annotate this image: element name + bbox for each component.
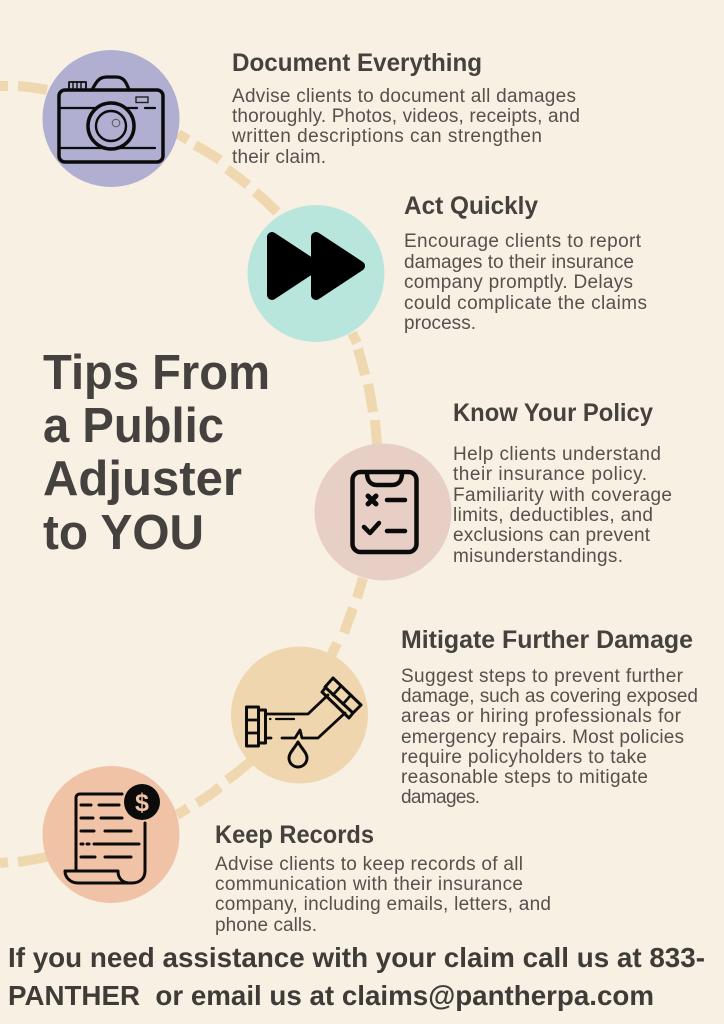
text: act quickly (404, 231, 647, 334)
icon: camera in purple circle (42, 50, 180, 187)
text: document everything: thoroughly. Photos, videos, receipts, and (232, 106, 580, 127)
tip 3: know your policy (314, 399, 672, 580)
heading: know your policy: Know Your Policy (453, 399, 653, 427)
text: mitigate further damage: damage, such as covering exposed (401, 686, 698, 707)
text: know your policy: limits, deductibles, and (453, 505, 653, 526)
footer call to action: PANTHER or email us at claims@pantherpa.com (8, 980, 654, 1011)
heading: document everything: Document Everything (232, 49, 482, 77)
text: mitigate further damage: Suggest steps to prevent further (401, 666, 684, 687)
text: act quickly: could complicate the claims (404, 293, 647, 314)
main title: to YOU (43, 506, 204, 560)
icon: invoice with dollar coin in peach circle (42, 766, 180, 903)
heading: keep records: Keep Records (215, 821, 374, 849)
tip 4: mitigate further damage (231, 626, 698, 808)
text: document everything: their claim. (232, 147, 326, 168)
text: keep records: Advise clients to keep records of all (215, 854, 523, 875)
text: know your policy: Help clients understand (453, 444, 661, 465)
dashed curved path connecting the tips (0, 86, 377, 863)
text: mitigate further damage: damages. (401, 787, 480, 808)
text: mitigate further damage: areas or hiring professionals for (401, 706, 682, 727)
main title (43, 346, 270, 560)
text: document everything: written descriptions can strengthen (231, 126, 542, 147)
text: document everything: Advise clients to document all damages (232, 86, 576, 107)
text: know your policy (453, 444, 672, 567)
text: document everything (231, 86, 580, 168)
text: know your policy: their insurance policy. (453, 464, 647, 485)
heading: mitigate further damage: Mitigate Further Damage (401, 626, 693, 654)
footer call to action (8, 942, 705, 1011)
text: mitigate further damage (401, 666, 698, 808)
text: mitigate further damage: emergency repairs. Most policies (401, 727, 684, 748)
text: mitigate further damage: require policyholders to take (401, 747, 647, 768)
tip 5: keep records (42, 766, 551, 936)
main title: Tips From (43, 346, 270, 400)
heading: act quickly: Act Quickly (404, 192, 538, 220)
text: keep records: communication with their insurance (215, 874, 523, 895)
text: act quickly: damages to their insurance (404, 252, 634, 273)
footer call to action: If you need assistance with your claim call us at 833- (8, 942, 705, 973)
text: keep records: phone calls. (215, 915, 317, 936)
tip 2: act quickly (248, 192, 647, 342)
tip 1: document everything (42, 49, 580, 187)
icon: checklist clipboard in rose circle (314, 444, 452, 580)
text: mitigate further damage: reasonable steps to mitigate (401, 767, 648, 788)
text: keep records: company, including emails, letters, and (215, 894, 551, 915)
icon: leaking pipe in tan circle (231, 646, 368, 784)
main title: Adjuster (43, 452, 242, 506)
text: know your policy: Familiarity with coverage (453, 485, 672, 506)
icon: invoice with dollar coin in peach circle: $ (135, 789, 149, 817)
text: keep records (215, 854, 551, 936)
text: know your policy: exclusions can prevent (453, 525, 651, 546)
text: know your policy: misunderstandings. (453, 546, 623, 567)
icon: fast forward in teal circle (248, 205, 384, 342)
main title: a Public (43, 399, 224, 453)
text: act quickly: process. (404, 313, 476, 334)
text: act quickly: Encourage clients to report (404, 231, 642, 252)
text: act quickly: company promptly. Delays (404, 272, 633, 293)
